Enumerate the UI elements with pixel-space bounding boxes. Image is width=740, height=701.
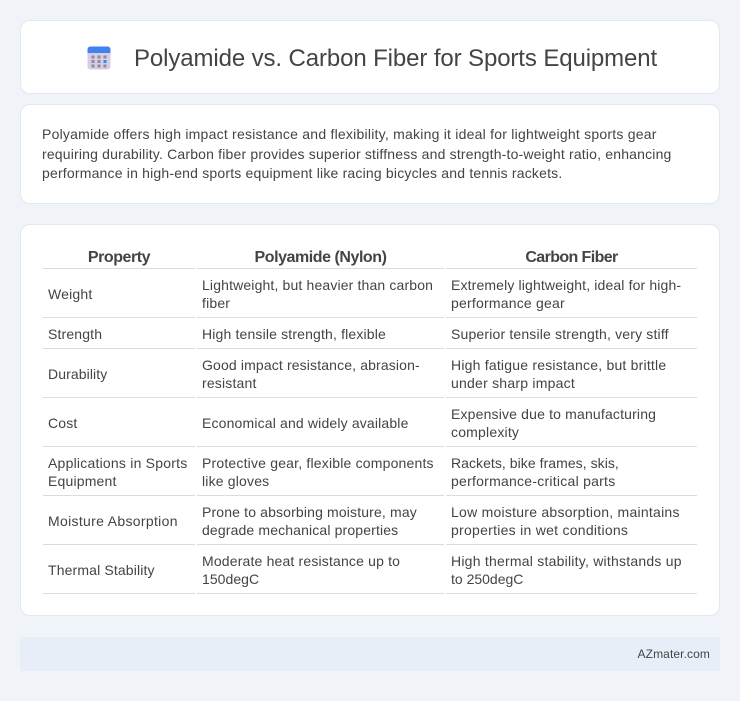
- row: applications: Rackets, bike frames, skis,: [451, 455, 619, 471]
- row: durability: under sharp impact: [451, 375, 575, 391]
- row: durability: Good impact resistance, abrasion-: [202, 357, 420, 373]
- table header: Property: [88, 249, 150, 266]
- row: moisture absorption: [48, 504, 680, 538]
- row: moisture absorption: properties in wet conditions: [451, 522, 628, 538]
- row: applications: Equipment: [48, 473, 117, 489]
- row: strength: [48, 326, 669, 342]
- row: thermal stability: [48, 553, 682, 587]
- footer text: source: AZmater.com: [638, 647, 710, 661]
- row: strength: Strength: [48, 326, 102, 342]
- row: weight: Weight: [48, 286, 92, 302]
- row: durability: High fatigue resistance, but brittle: [451, 357, 666, 373]
- comparison table: [43, 249, 697, 594]
- table header: Carbon Fiber: [525, 249, 618, 266]
- row: cost: [48, 406, 656, 440]
- row: applications: like gloves: [202, 473, 269, 489]
- row: weight: Extremely lightweight, ideal for high-: [451, 277, 681, 293]
- table header: Polyamide (Nylon): [255, 249, 386, 266]
- row: thermal stability: Thermal Stability: [48, 562, 155, 578]
- table header: [88, 249, 618, 266]
- summary text: [42, 126, 672, 181]
- summary text: Polyamide offers high impact resistance and flexibility, making it ideal for lightweight sports gear: [42, 126, 657, 142]
- row: weight: performance gear: [451, 295, 565, 311]
- row: cost: complexity: [451, 424, 519, 440]
- row: strength: High tensile strength, flexible: [202, 326, 386, 342]
- row: durability: [48, 357, 666, 391]
- row: applications: Protective gear, flexible components: [202, 455, 434, 471]
- row: durability: Durability: [48, 366, 107, 382]
- row: thermal stability: Moderate heat resistance up to: [202, 553, 400, 569]
- row: moisture absorption: Prone to absorbing moisture, may: [202, 504, 417, 520]
- row: thermal stability: 150degC: [202, 571, 259, 587]
- panel: summary: [20, 104, 720, 204]
- row: cost: Cost: [48, 415, 78, 431]
- row: moisture absorption: Moisture Absorption: [48, 513, 178, 529]
- panel: title header: [20, 20, 720, 94]
- summary text: performance in high-end sports equipment like racing bicycles and tennis rackets.: [42, 165, 562, 181]
- row: moisture absorption: degrade mechanical properties: [202, 522, 398, 538]
- row: weight: fiber: [202, 295, 230, 311]
- row: cost: Expensive due to manufacturing: [451, 406, 656, 422]
- row: thermal stability: to 250degC: [451, 571, 523, 587]
- row: strength: Superior tensile strength, very stiff: [451, 326, 669, 342]
- row: weight: [48, 277, 681, 311]
- row: applications: performance-critical parts: [451, 473, 615, 489]
- row: cost: Economical and widely available: [202, 415, 409, 431]
- row: applications: [48, 455, 619, 489]
- icon: calendar: [88, 46, 110, 70]
- row: durability: resistant: [202, 375, 257, 391]
- footer bar: [20, 637, 720, 671]
- row: applications: Applications in Sports: [48, 455, 187, 471]
- row: thermal stability: High thermal stability, withstands up: [451, 553, 682, 569]
- title: Polyamide vs. Carbon Fiber for Sports Equipment: [134, 45, 657, 72]
- row: weight: Lightweight, but heavier than carbon: [202, 277, 433, 293]
- summary text: requiring durability. Carbon fiber provides superior stiffness and strength-to-weight ratio, enhancing: [42, 146, 672, 162]
- panel: comparison table: [20, 224, 720, 616]
- row: moisture absorption: Low moisture absorption, maintains: [451, 504, 680, 520]
